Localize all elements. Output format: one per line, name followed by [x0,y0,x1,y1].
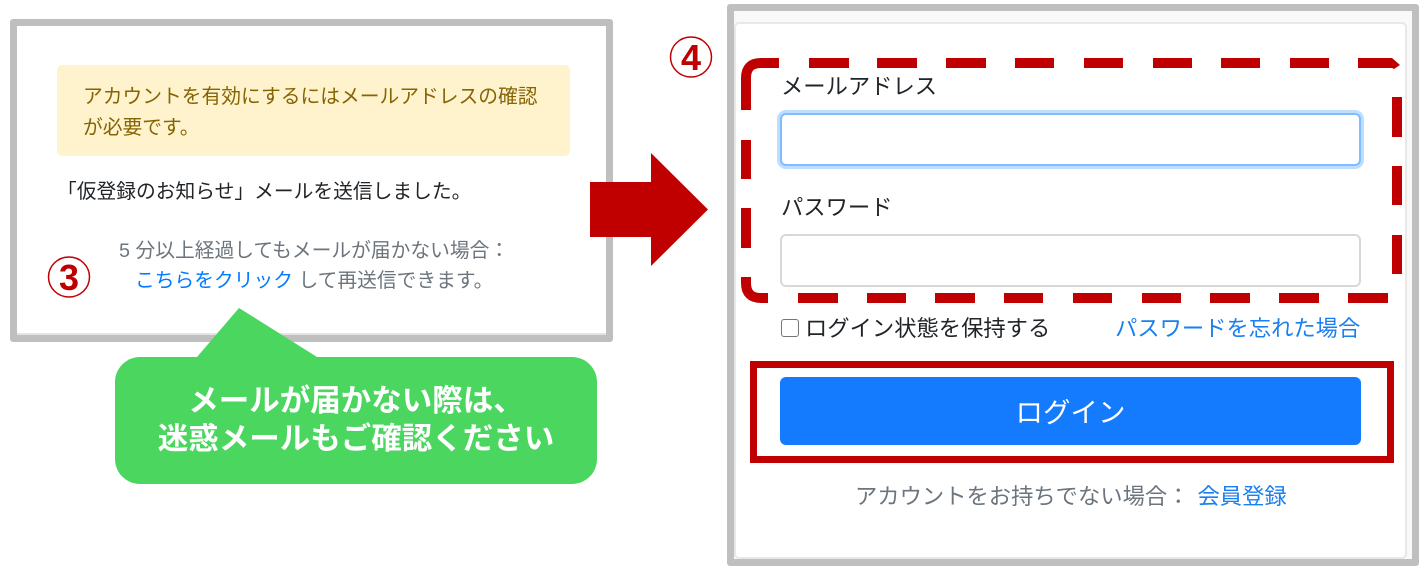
alert text: が必要です。 [83,117,200,139]
text: resend instructions: 5 分以上経過してもメールが届かない場合： [119,240,509,262]
login card [734,22,1407,559]
callout: check spam folder [115,308,597,484]
step number 4: 4 [681,37,701,78]
alert box: verification required [57,65,570,156]
text: email sent notice: 「仮登録のお知らせ」メールを送信しました。 [57,181,471,203]
callout text [158,384,554,456]
solid highlight: login button [750,361,1394,463]
alert text [83,86,537,139]
panel: login form screen [727,4,1419,566]
callout text: 迷惑メールもご確認ください [158,422,554,456]
callout text: メールが届かない際は、 [188,384,524,418]
checkbox: keep logged in [781,319,799,337]
step number 3 [48,256,90,298]
dashed highlight: credentials [741,58,1402,303]
arrow: to login screen [590,153,708,266]
text: register prompt: アカウントをお持ちでない場合： 会員登録 [855,484,1287,509]
input: email focused [780,113,1361,166]
button: login [780,377,1361,445]
panel: email confirmation screen [10,19,613,342]
input: password [780,234,1361,287]
label: email address: メールアドレス [781,74,937,99]
panel bottom edge [17,333,606,335]
step number 4 [670,36,712,78]
label: keep logged in: ログイン状態を保持する [805,316,1050,341]
callout bubble shape [115,308,597,484]
text: resend instructions [119,240,509,292]
alert text: アカウントを有効にするにはメールアドレスの確認 [83,86,537,108]
link: forgot password: パスワードを忘れた場合 [1115,316,1360,341]
text: resend instructions: こちらをクリック して再送信できます。 [135,270,493,292]
step number 3: 3 [59,257,79,298]
label: password: パスワード [781,195,892,220]
button: login: ログイン [1016,397,1126,428]
